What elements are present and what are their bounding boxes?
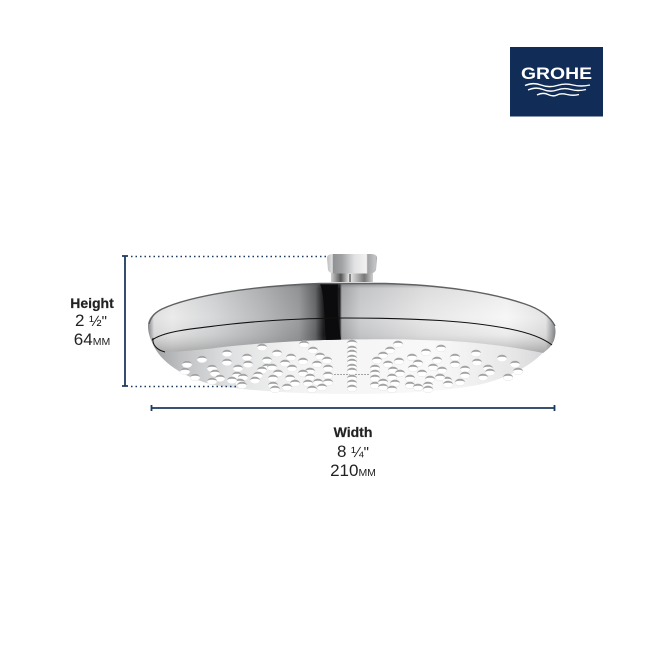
width label: 210MM [330,461,376,480]
dark reflection band [320,284,341,340]
height dimension line [122,256,326,386]
GROHE logo: GROHE [521,64,592,83]
face plate [150,336,554,394]
top edge highlight [149,284,555,326]
height label [70,295,114,349]
centre cross line [334,374,369,376]
seam line [152,318,552,345]
height label: 64MM [74,330,110,349]
width dimension line [152,405,555,411]
GROHE logo [510,47,603,116]
width label: 8 ¼" [337,442,369,461]
connector nut [327,254,377,282]
width label: Width [334,424,372,440]
shower head [148,254,556,394]
spray nozzles [180,340,523,393]
height label: Height [70,295,114,311]
width label [330,424,376,480]
chrome body [148,284,556,353]
height label: 2 ½" [75,311,107,330]
body vertical shading [148,284,556,353]
